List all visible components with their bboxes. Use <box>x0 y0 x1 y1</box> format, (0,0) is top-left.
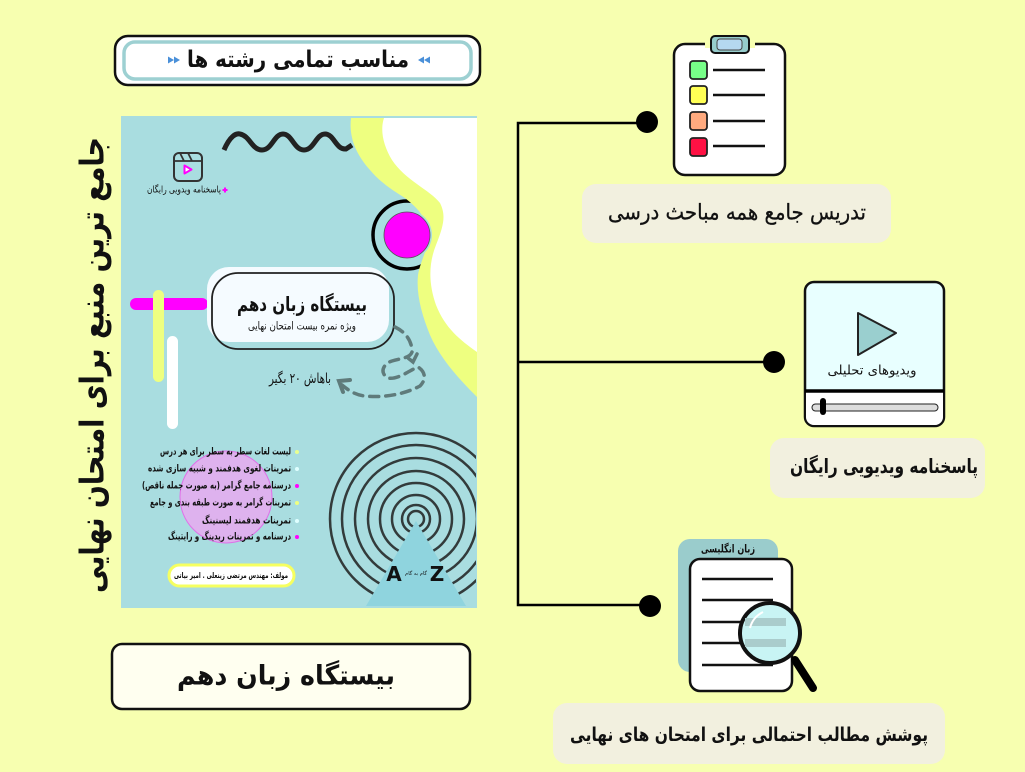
author pill: مولف: مهندس مرتضی زینعلی . امیر بیاتی <box>174 571 288 581</box>
label: comprehensive teaching: تدریس جامع همه مباحث درسی <box>608 200 866 226</box>
A to Z triangle <box>366 521 466 606</box>
black ring <box>371 199 421 271</box>
handwritten note: باهاش ۲۰ بگیر <box>268 370 331 387</box>
title card: ویژه نمره بیست امتحان نهایی <box>248 320 356 332</box>
A to Z triangle: Z <box>430 562 444 586</box>
wave decoration <box>224 134 352 150</box>
A to Z triangle: A <box>386 562 402 586</box>
label: coverage of likely exam topics: پوشش مطالب احتمالی برای امتحان های نهایی <box>570 724 928 746</box>
icon: clipboard checklist <box>674 36 785 175</box>
panel: poster cover <box>121 116 502 608</box>
title card <box>207 267 394 349</box>
purple circle <box>180 451 272 543</box>
bottom title box: بیستگاه زبان دهم <box>177 660 395 692</box>
feature list: تمرینات هدفمند لیسنینگ <box>202 514 291 526</box>
yellow wave shape <box>351 118 477 397</box>
label: coverage of likely exam topics <box>553 703 945 764</box>
white wave shape <box>382 118 477 352</box>
icon: document with magnifier <box>678 539 813 691</box>
bars <box>130 290 208 429</box>
icon: video player: ویدیوهای تحلیلی <box>828 364 916 378</box>
feature list: لیست لغات سطر به سطر برای هر درس <box>160 446 291 458</box>
A to Z triangle: گام به گام <box>405 570 428 577</box>
feature list: درسنامه جامع گرامر (به صورت جمله ناقص) <box>142 478 291 492</box>
feature list: تمرینات لغوی هدفمند و شبیه سازی شده <box>148 464 291 474</box>
concentric rings <box>328 432 476 595</box>
feature list: تمرینات گرامر به صورت طبقه بندی و جامع <box>150 496 291 508</box>
feature list <box>142 446 299 542</box>
bottom title box <box>112 644 470 709</box>
dashed arrow <box>339 327 424 397</box>
label: free video answers <box>770 438 985 498</box>
top badge: suitable for all majors <box>115 36 480 85</box>
label: comprehensive teaching <box>582 184 891 243</box>
icon: document with magnifier: زبان انگلیسی <box>701 542 755 556</box>
title card: بیستگاه زبان دهم <box>237 292 367 316</box>
magenta circle <box>382 210 432 260</box>
top badge: suitable for all majors: مناسب تمامی رشته ها <box>187 47 409 73</box>
author pill <box>169 565 294 586</box>
feature list: درسنامه و تمرینات ریدینگ و رایتینگ <box>168 530 291 542</box>
connector lines <box>518 111 785 617</box>
free video answers label: پاسخنامه ویدویی رایگان <box>147 184 221 196</box>
icon: video player <box>805 282 944 426</box>
icon: video clapper <box>174 153 202 181</box>
vertical title: جامع ترین منبع برای امتحان نهایی <box>72 137 112 593</box>
